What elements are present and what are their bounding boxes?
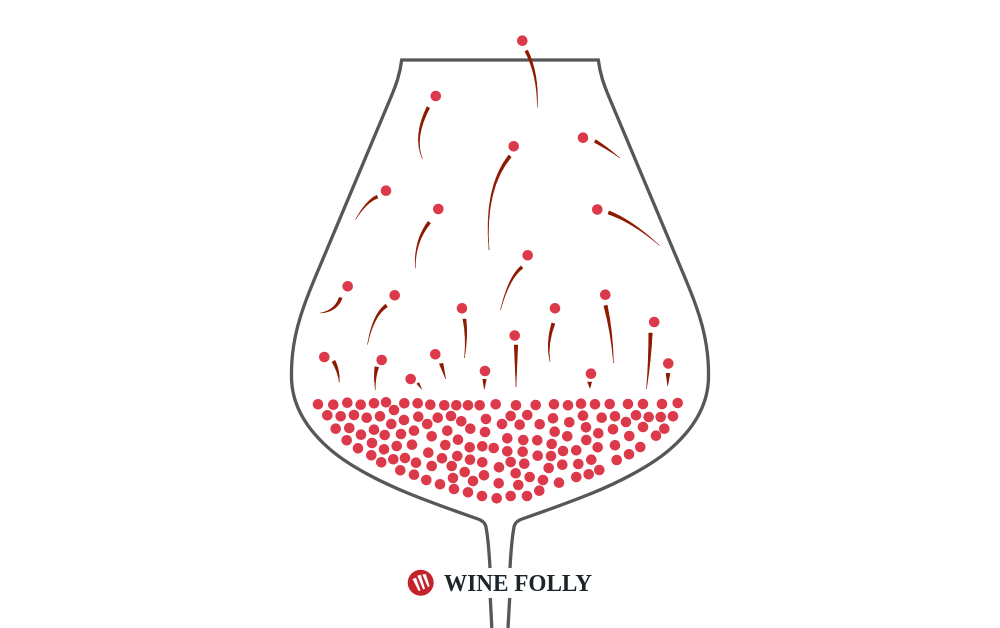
rising droplet 19 xyxy=(430,349,446,379)
wine glass bowl and upper stem xyxy=(291,60,709,568)
rising droplet 15 xyxy=(509,330,520,387)
rising droplet 17 xyxy=(586,368,596,388)
rising droplet 4 xyxy=(488,141,519,250)
rising droplet 2 xyxy=(578,132,620,158)
icon: logo badge with bottle stripes xyxy=(408,570,434,596)
rising droplet 14 xyxy=(646,317,660,389)
rising droplet 18 xyxy=(480,366,490,389)
rising droplet 9 xyxy=(320,281,353,313)
rising droplet 6 xyxy=(415,204,444,268)
rising droplet 10 xyxy=(368,290,400,344)
rising droplet 7 xyxy=(592,204,660,246)
rising droplet 11 xyxy=(457,303,467,358)
wordmark: WINE FOLLY xyxy=(444,571,592,597)
rising droplet 5 xyxy=(356,185,391,220)
lower stem xyxy=(490,598,510,628)
rising droplet 21 xyxy=(374,355,387,390)
rising droplet 20 xyxy=(405,374,422,389)
logo: Wine Folly xyxy=(408,570,592,597)
rising droplet 22 xyxy=(319,352,339,383)
rising droplet 3 xyxy=(418,91,441,159)
pool of wine droplets xyxy=(313,397,683,504)
rising droplet 12 xyxy=(548,303,560,362)
rising droplet 1 xyxy=(517,35,538,107)
rising droplet 13 xyxy=(600,289,614,363)
rising droplet 8 xyxy=(500,250,533,310)
rising droplet 16 xyxy=(663,358,674,386)
